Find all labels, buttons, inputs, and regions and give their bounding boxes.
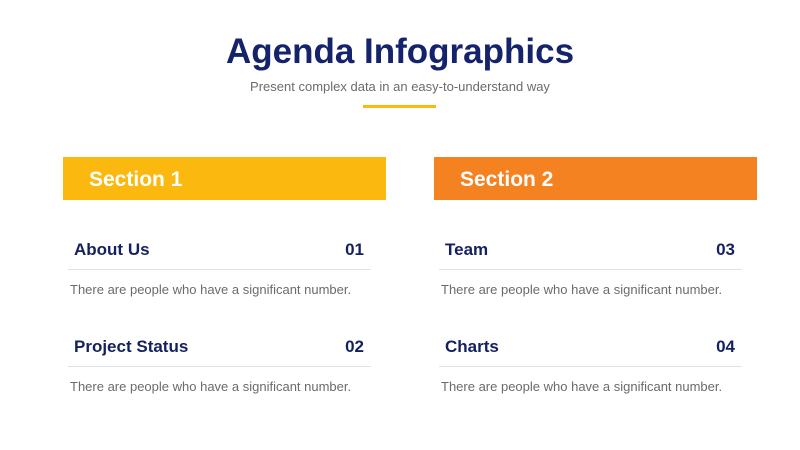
item: Project Status: There are people who have a significant number. — [70, 379, 351, 394]
item: Project Status: Project Status — [74, 337, 188, 356]
item: Team: Team — [445, 240, 488, 259]
subtitle: Present complex data in an easy-to-understand way — [250, 79, 550, 94]
underline accent — [363, 105, 436, 108]
item: Team: There are people who have a significant number. — [441, 282, 722, 297]
item: About Us — [68, 240, 371, 297]
item: About Us: There are people who have a significant number. — [70, 282, 351, 297]
title: Agenda Infographics — [226, 32, 574, 71]
item: About Us: About Us — [74, 240, 150, 259]
panel: section 1 header — [63, 157, 386, 200]
item: Team: 03 — [716, 240, 735, 259]
panel: section 1 header: Section 1 — [89, 168, 182, 191]
panel: section 2 header — [434, 157, 757, 200]
item: Charts: 04 — [716, 337, 735, 356]
item: Charts: Charts — [445, 337, 499, 356]
item: Team — [439, 240, 742, 297]
item: About Us: 01 — [345, 240, 364, 259]
item: Charts: There are people who have a significant number. — [441, 379, 722, 394]
item: Charts — [439, 337, 742, 394]
panel: section 2 header: Section 2 — [460, 168, 553, 191]
item: Project Status — [68, 337, 371, 394]
item: Project Status: 02 — [345, 337, 364, 356]
